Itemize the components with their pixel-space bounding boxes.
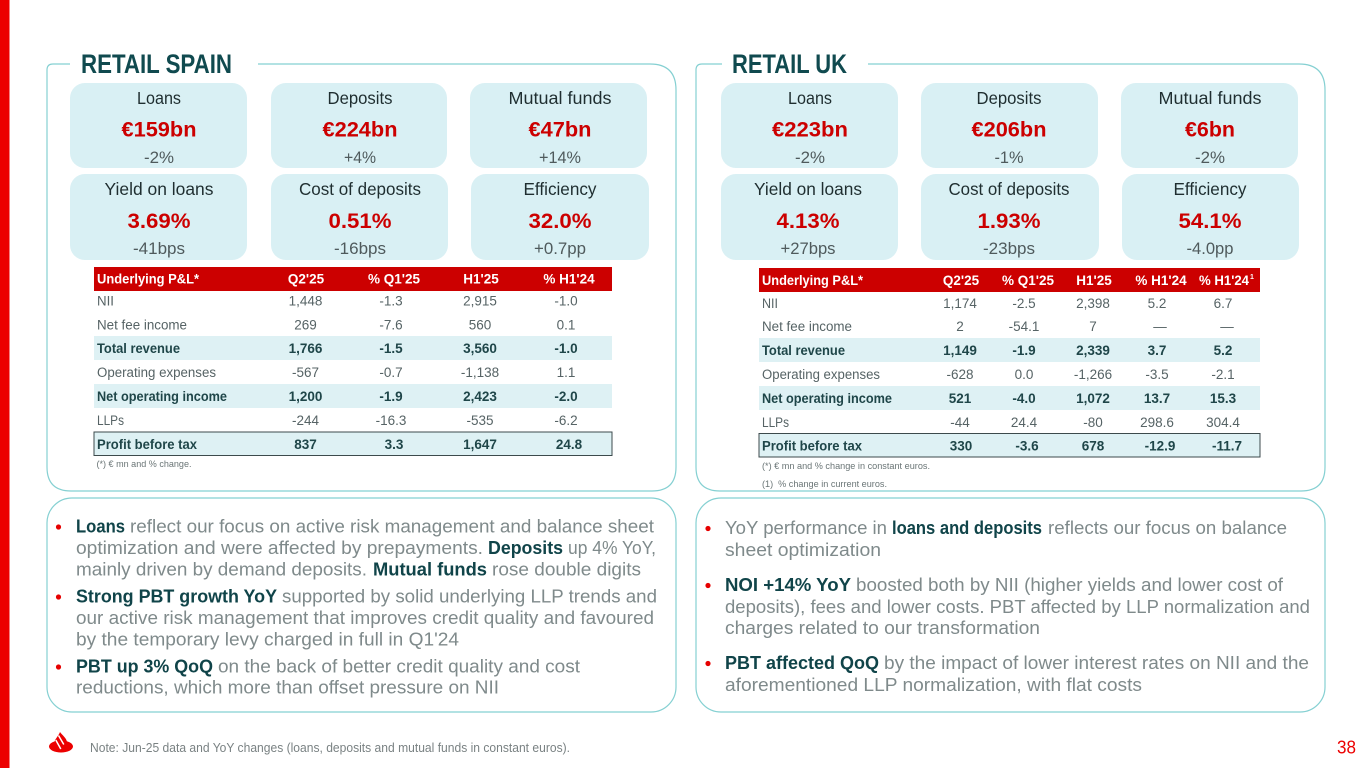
row: net fee income: — <box>1220 319 1234 334</box>
card: yield on loans: Yield on loans <box>104 179 214 199</box>
row: operating expenses: Operating expenses <box>762 367 880 382</box>
bullet: strong PBT growth: by the temporary levy charged in full in Q1'24 <box>76 628 459 650</box>
card: deposits <box>921 83 1098 168</box>
row: NII: 1,174 <box>943 296 977 311</box>
table header: % Q1'25 <box>1002 273 1054 288</box>
card: cost of deposits: 1.93% <box>978 209 1040 233</box>
row: profit before tax: -12.9 <box>1145 438 1175 454</box>
footnotes: uk table <box>762 461 930 490</box>
row: total revenue: 1,766 <box>289 341 323 356</box>
card: yield on loans: 4.13% <box>776 209 840 233</box>
card: yield on loans <box>721 174 898 260</box>
bullet: strong PBT growth: supported by solid underlying LLP trends and <box>282 586 657 606</box>
card: yield on loans: +27bps <box>780 240 836 258</box>
bullet: YoY performance: loans and deposits <box>892 517 1042 538</box>
footnote: spain table: (*) € mn and % change. <box>96 459 192 470</box>
card: loans <box>70 83 247 168</box>
panel: retail uk <box>696 49 1325 491</box>
heading: retail spain: RETAIL SPAIN <box>81 49 232 79</box>
row: net fee income: — <box>1153 319 1167 334</box>
row: profit before tax: 3.3 <box>385 437 404 452</box>
bullet: PBT up QoQ: on the back of better credit quality and cost <box>218 656 580 676</box>
bullet: strong PBT growth: Strong PBT growth YoY <box>76 586 278 606</box>
table header: % Q1'25 <box>368 272 420 286</box>
card: efficiency: Efficiency <box>1174 179 1247 199</box>
row: total revenue: 5.2 <box>1214 343 1232 358</box>
page number: 38 <box>1337 738 1356 758</box>
row: net fee income: Net fee income <box>762 319 852 334</box>
row: net operating income: 13.7 <box>1144 391 1170 406</box>
row: operating expenses: Operating expenses <box>97 365 216 380</box>
bullet: loans, deposits, mutual funds: reflect our focus on active risk management and balance sheet <box>130 516 654 536</box>
table header <box>759 268 1260 292</box>
card: yield on loans: -41bps <box>133 240 185 258</box>
row: profit before tax: 330 <box>950 438 972 454</box>
bullet: NOI growth: deposits), fees and lower costs. PBT affected by LLP normalization and <box>725 596 1310 617</box>
row: net operating income: 2,423 <box>463 389 497 404</box>
card: mutual funds <box>470 83 647 168</box>
row: LLPs: -244 <box>292 413 319 428</box>
row: operating expenses: -0.7 <box>379 365 403 380</box>
table header: Q2'25 <box>288 272 325 286</box>
row: net fee income: 2 <box>956 319 964 334</box>
table header: Q2'25 <box>943 273 980 288</box>
row: NII: 6.7 <box>1214 296 1232 311</box>
row: net fee income: Net fee income <box>97 318 187 332</box>
heading: retail uk: RETAIL UK <box>732 49 847 79</box>
bullet: NOI growth: NOI +14% YoY <box>725 574 852 595</box>
bullet: NOI growth: boosted both by NII (higher yields and lower cost of <box>856 574 1284 595</box>
card: loans: Loans <box>788 88 832 108</box>
row: total revenue <box>94 336 612 360</box>
card: deposits <box>271 83 447 168</box>
panel: spain commentary <box>47 498 676 712</box>
card: cost of deposits: -16bps <box>334 240 386 258</box>
row: NII <box>762 296 1232 311</box>
row: net fee income <box>97 318 575 332</box>
row: LLPs <box>762 415 1240 430</box>
row: net operating income: Net operating income <box>97 389 227 404</box>
card: deposits: €224bn <box>322 118 398 142</box>
row: NII: 5.2 <box>1148 296 1166 311</box>
row: NII <box>97 294 578 308</box>
row: net operating income: 15.3 <box>1210 391 1237 406</box>
card: deposits: Deposits <box>328 88 393 108</box>
row: net operating income: -1.9 <box>379 389 403 404</box>
bullet: loans, deposits, mutual funds: optimization and were affected by prepayments. <box>76 537 483 558</box>
bullet: loans, deposits, mutual funds: up 4% YoY, <box>568 537 656 558</box>
row: operating expenses: -3.5 <box>1145 367 1169 382</box>
row: operating expenses: 0.0 <box>1015 367 1033 382</box>
row: operating expenses: 1.1 <box>557 365 575 380</box>
bullet: loans, deposits, mutual funds <box>56 516 656 580</box>
card: efficiency <box>471 174 649 260</box>
bullet: loans, deposits, mutual funds: Loans <box>76 516 125 536</box>
panel: retail spain <box>47 49 676 491</box>
row: profit before tax: 678 <box>1082 438 1105 454</box>
bullet: PBT up QoQ: PBT up 3% QoQ <box>76 656 213 676</box>
table header: % H1'24 <box>1199 273 1249 288</box>
bullet: PBT affected QoQ <box>705 652 1309 695</box>
row: total revenue: Total revenue <box>762 343 845 358</box>
bullet: YoY performance: reflects our focus on balance <box>1048 517 1287 538</box>
card: cost of deposits: Cost of deposits <box>948 179 1070 199</box>
card: yield on loans: Yield on loans <box>754 179 862 199</box>
card: deposits: +4% <box>344 149 376 167</box>
row: total revenue: -1.5 <box>379 341 403 356</box>
card: loans: -2% <box>795 149 825 167</box>
row: operating expenses: -567 <box>292 365 319 380</box>
row: profit before tax: -11.7 <box>1212 438 1242 454</box>
icon: santander flame logo <box>49 732 73 752</box>
row: NII: -1.0 <box>554 294 578 308</box>
row: operating expenses: -628 <box>946 367 974 382</box>
bullet: loans, deposits, mutual funds: Deposits <box>488 537 563 558</box>
row: total revenue: 3.7 <box>1148 343 1166 358</box>
row: NII: NII <box>97 294 114 308</box>
row: NII: -1.3 <box>379 294 403 308</box>
row: profit before tax: Profit before tax <box>762 438 862 454</box>
row: net operating income: 1,072 <box>1076 391 1110 406</box>
table: spain underlying P&L <box>94 267 612 456</box>
row: LLPs <box>97 413 578 428</box>
table header: Underlying P&L* <box>762 273 864 288</box>
row: operating expenses: -2.1 <box>1211 367 1235 382</box>
row: total revenue: Total revenue <box>97 341 180 356</box>
card: yield on loans: 3.69% <box>128 209 190 233</box>
row: LLPs: -535 <box>466 413 494 428</box>
card: cost of deposits: Cost of deposits <box>299 179 421 199</box>
row: LLPs: LLPs <box>97 413 124 428</box>
row: operating expenses: -1,266 <box>1074 367 1112 382</box>
card: yield on loans <box>70 174 247 260</box>
card: deposits: €206bn <box>972 118 1046 142</box>
row: total revenue: 2,339 <box>1076 343 1110 358</box>
row: net operating income <box>759 386 1260 410</box>
row: net fee income: -54.1 <box>1009 319 1039 334</box>
red side bar <box>0 0 10 768</box>
bullet: loans, deposits, mutual funds: rose double digits <box>492 558 641 580</box>
table: uk underlying P&L <box>759 268 1260 457</box>
row: profit before tax <box>759 434 1260 457</box>
row: NII: 2,398 <box>1076 296 1110 311</box>
card: mutual funds: Mutual funds <box>508 88 612 108</box>
bullet: PBT affected QoQ: by the impact of lower interest rates on NII and the <box>884 652 1309 673</box>
row: profit before tax <box>94 432 612 456</box>
card: loans: Loans <box>137 88 181 108</box>
row: net operating income: -2.0 <box>554 389 578 404</box>
card: loans: -2% <box>144 149 174 167</box>
card: loans: €223bn <box>772 118 848 142</box>
row: profit before tax: 24.8 <box>556 437 583 452</box>
row: NII: -2.5 <box>1012 296 1036 311</box>
table header: Underlying P&L* <box>97 272 200 286</box>
footnotes: uk table: (1) % change in current euros. <box>762 479 887 490</box>
card: loans: €159bn <box>122 118 196 142</box>
row: profit before tax: 1,647 <box>463 437 497 452</box>
card: mutual funds <box>1121 83 1298 168</box>
row: total revenue <box>759 338 1260 362</box>
row: profit before tax: Profit before tax <box>97 437 197 452</box>
row: total revenue: 3,560 <box>463 341 497 356</box>
bullet: YoY performance: sheet optimization <box>725 539 881 560</box>
row: NII: 1,448 <box>289 294 322 308</box>
bullet: NOI growth <box>705 574 1310 638</box>
row: net fee income: 7 <box>1089 319 1097 334</box>
bullet: loans, deposits, mutual funds: Mutual funds <box>373 558 487 580</box>
row: operating expenses: -1,138 <box>461 365 499 380</box>
row: LLPs: -16.3 <box>376 413 406 428</box>
bullet: PBT up QoQ <box>56 656 580 698</box>
table header: H1'25 <box>1076 273 1112 288</box>
card: cost of deposits: -23bps <box>983 240 1035 258</box>
row: NII: NII <box>762 296 778 311</box>
card: mutual funds: -2% <box>1195 149 1225 167</box>
row: LLPs: -44 <box>950 415 970 430</box>
row: profit before tax: 837 <box>294 437 317 452</box>
table header: % H1'24 <box>543 272 595 286</box>
row: profit before tax: -3.6 <box>1015 438 1039 454</box>
row: total revenue: -1.9 <box>1012 343 1036 358</box>
row: LLPs: 298.6 <box>1140 415 1174 430</box>
card: deposits: Deposits <box>976 88 1042 108</box>
card: efficiency: Efficiency <box>524 179 597 199</box>
row: LLPs: -6.2 <box>554 413 578 428</box>
bullet: PBT up QoQ: reductions, which more than offset pressure on NII <box>76 676 499 698</box>
bullet: strong PBT growth: our active risk management that improves credit quality and favoured <box>76 607 654 628</box>
bullet: YoY performance <box>705 517 1287 560</box>
bullet: YoY performance: YoY performance in <box>725 517 887 538</box>
row: net fee income: 560 <box>469 318 491 332</box>
panel: uk commentary <box>696 498 1325 712</box>
card: cost of deposits <box>921 174 1099 260</box>
row: operating expenses <box>97 365 575 380</box>
row: net operating income: 521 <box>949 391 972 406</box>
card: efficiency: -4.0pp <box>1186 240 1234 258</box>
row: NII: 2,915 <box>463 294 497 308</box>
row: net fee income: -7.6 <box>379 318 403 332</box>
footnotes: uk table: (*) € mn and % change in constant euros. <box>762 461 930 472</box>
bullet: strong PBT growth <box>56 586 657 650</box>
card: mutual funds: €6bn <box>1185 118 1235 142</box>
table header: % H1'24 <box>1135 273 1187 288</box>
card: mutual funds: Mutual funds <box>1158 88 1262 108</box>
row: net operating income <box>94 384 612 408</box>
row: operating expenses <box>762 367 1235 382</box>
card: efficiency: 54.1% <box>1178 209 1242 233</box>
row: LLPs: 24.4 <box>1011 415 1038 430</box>
table header: H1'25 <box>463 272 499 286</box>
bullet: PBT affected QoQ: aforementioned LLP normalization, with flat costs <box>725 674 1142 695</box>
bullet: PBT affected QoQ: PBT affected QoQ <box>725 652 879 673</box>
card: mutual funds: +14% <box>539 149 581 167</box>
card: cost of deposits: 0.51% <box>328 209 392 233</box>
card: efficiency <box>1122 174 1299 260</box>
row: net fee income: 0.1 <box>557 318 575 332</box>
row: net operating income: 1,200 <box>289 389 322 404</box>
row: LLPs: -80 <box>1083 415 1103 430</box>
card: cost of deposits <box>271 174 448 260</box>
row: LLPs: LLPs <box>762 415 789 430</box>
card: efficiency: +0.7pp <box>534 240 586 258</box>
table header <box>94 267 612 291</box>
table header: 1 <box>1250 274 1254 281</box>
footer note: Note: Jun-25 data and YoY changes (loans, deposits and mutual funds in constant euros). <box>90 741 570 755</box>
card: deposits: -1% <box>994 149 1024 167</box>
card: efficiency: 32.0% <box>528 209 592 233</box>
row: LLPs: 304.4 <box>1206 415 1240 430</box>
row: net operating income: Net operating income <box>762 391 892 406</box>
row: total revenue: -1.0 <box>554 341 578 356</box>
card: loans <box>721 83 898 168</box>
row: total revenue: 1,149 <box>943 343 977 358</box>
card: mutual funds: €47bn <box>528 118 592 142</box>
row: net fee income <box>762 319 1234 334</box>
row: net operating income: -4.0 <box>1012 391 1036 406</box>
bullet: NOI growth: charges related to our transformation <box>725 617 1040 638</box>
row: net fee income: 269 <box>294 318 317 332</box>
bullet: loans, deposits, mutual funds: mainly driven by demand deposits. <box>76 558 367 580</box>
